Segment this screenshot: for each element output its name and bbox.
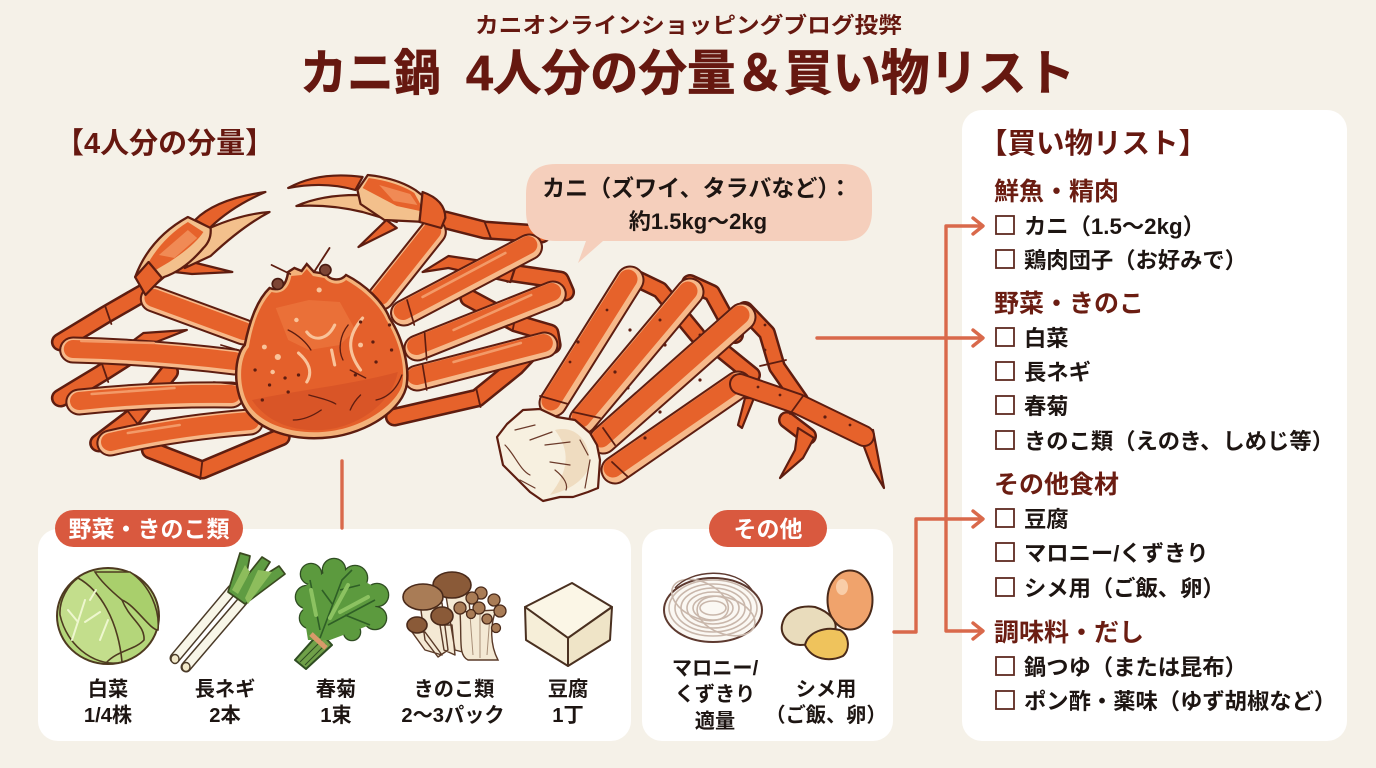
- label: long green onion: 長ネギ: [195, 678, 255, 701]
- icon: noodles: [664, 571, 762, 643]
- list group: other ingredients: その他食材: [994, 471, 1119, 499]
- list group: seasonings and stock: [994, 619, 1336, 714]
- list group: other ingredients: シメ用（ご飯、卵）: [1024, 575, 1225, 601]
- panel: vegetables and mushrooms: [38, 529, 631, 741]
- list group: seafood and meat: [994, 178, 1247, 273]
- back leg segments: [61, 220, 565, 479]
- label: tofu: 豆腐: [548, 678, 588, 701]
- list group: vegetables and mushrooms: 白菜: [1024, 326, 1069, 351]
- lower claws: [738, 398, 754, 428]
- panel: others: [642, 529, 893, 741]
- crab meat end: [497, 409, 600, 501]
- label: shungiku: 1束: [320, 704, 352, 727]
- icon: tofu: [525, 583, 612, 666]
- label: shungiku: 春菊: [316, 678, 356, 701]
- label: finishing course: シメ用: [796, 679, 856, 701]
- list group: seasonings and stock: ポン酢・薬味（ゆず胡椒など）: [1024, 689, 1336, 714]
- arrows: crab and ingredients to shopping list: [817, 218, 983, 639]
- pill: others: その他: [734, 516, 802, 542]
- illustration: whole crab: [61, 175, 565, 479]
- panel: shopping list: [962, 110, 1347, 741]
- label: noodles: 適量: [695, 710, 735, 733]
- list group: seafood and meat: カニ（1.5〜2kg）: [1024, 214, 1205, 239]
- label: tofu: 1丁: [552, 705, 584, 727]
- label: noodles: マロニー/: [672, 658, 759, 680]
- pill: vegetables and mushrooms: [55, 510, 243, 547]
- label: napa cabbage: 1/4株: [84, 704, 132, 727]
- list group: other ingredients: マロニー/くずきり: [1024, 541, 1209, 566]
- illustration: crab legs cluster: [497, 277, 884, 501]
- list group: vegetables and mushrooms: 春菊: [1024, 394, 1069, 419]
- crab shell: [236, 264, 407, 438]
- callout: crab amount: 約1.5kg〜2kg: [629, 209, 767, 234]
- list group: vegetables and mushrooms: [994, 290, 1334, 454]
- icon: mushrooms: [403, 572, 506, 660]
- heading: 4 servings: 【4人分の分量】: [55, 127, 274, 160]
- callout: crab amount: [526, 164, 872, 263]
- leg dots: [569, 309, 851, 440]
- left claw: [135, 192, 270, 295]
- label: noodles: くずきり: [675, 683, 755, 706]
- label: mushrooms: きのこ類: [414, 678, 494, 701]
- list group: seafood and meat: 鮮魚・精肉: [994, 178, 1119, 206]
- list group: seasonings and stock: 鍋つゆ（または昆布）: [1024, 655, 1247, 680]
- label: finishing course: （ご飯、卵）: [765, 703, 887, 727]
- list group: other ingredients: [994, 471, 1225, 601]
- pill: vegetables and mushrooms: 野菜・きのこ類: [68, 516, 230, 542]
- icon: napa cabbage: [57, 568, 159, 664]
- label: long green onion: 2本: [209, 704, 241, 727]
- callout: crab amount: カニ（ズワイ、タラバなど）：: [542, 175, 852, 201]
- small pointed leg tips: [121, 330, 187, 358]
- right claw: [288, 175, 445, 247]
- front leg femurs: [73, 231, 553, 443]
- main leg sections: [540, 279, 864, 477]
- title: 4人分の分量＆買い物リスト: [466, 47, 1075, 101]
- pill: others: [709, 510, 827, 547]
- title: カニ鍋: [300, 47, 441, 101]
- subtitle: カニオンラインショッピングブログ投弊: [475, 13, 902, 38]
- list group: other ingredients: 豆腐: [1024, 507, 1069, 532]
- icon: egg and rice: [782, 570, 872, 659]
- crab eyes and antennae: [272, 248, 331, 289]
- list group: vegetables and mushrooms: きのこ類（えのき、しめじ等）: [1024, 429, 1334, 454]
- list group: vegetables and mushrooms: 野菜・きのこ: [994, 290, 1144, 318]
- label: mushrooms: 2〜3パック: [401, 704, 505, 727]
- rear leg segments: [633, 277, 808, 436]
- list group: seasonings and stock: 調味料・だし: [994, 619, 1144, 647]
- icon: long green onion: [171, 553, 285, 672]
- icon: shungiku: [295, 559, 388, 669]
- label: napa cabbage: 白菜: [88, 678, 128, 701]
- heading: shopping list: 【買い物リスト】: [979, 128, 1207, 160]
- connector: crab to vegetables: [340, 461, 344, 528]
- list group: seafood and meat: 鶏肉団子（お好みで）: [1024, 248, 1247, 273]
- list group: vegetables and mushrooms: 長ネギ: [1024, 360, 1091, 385]
